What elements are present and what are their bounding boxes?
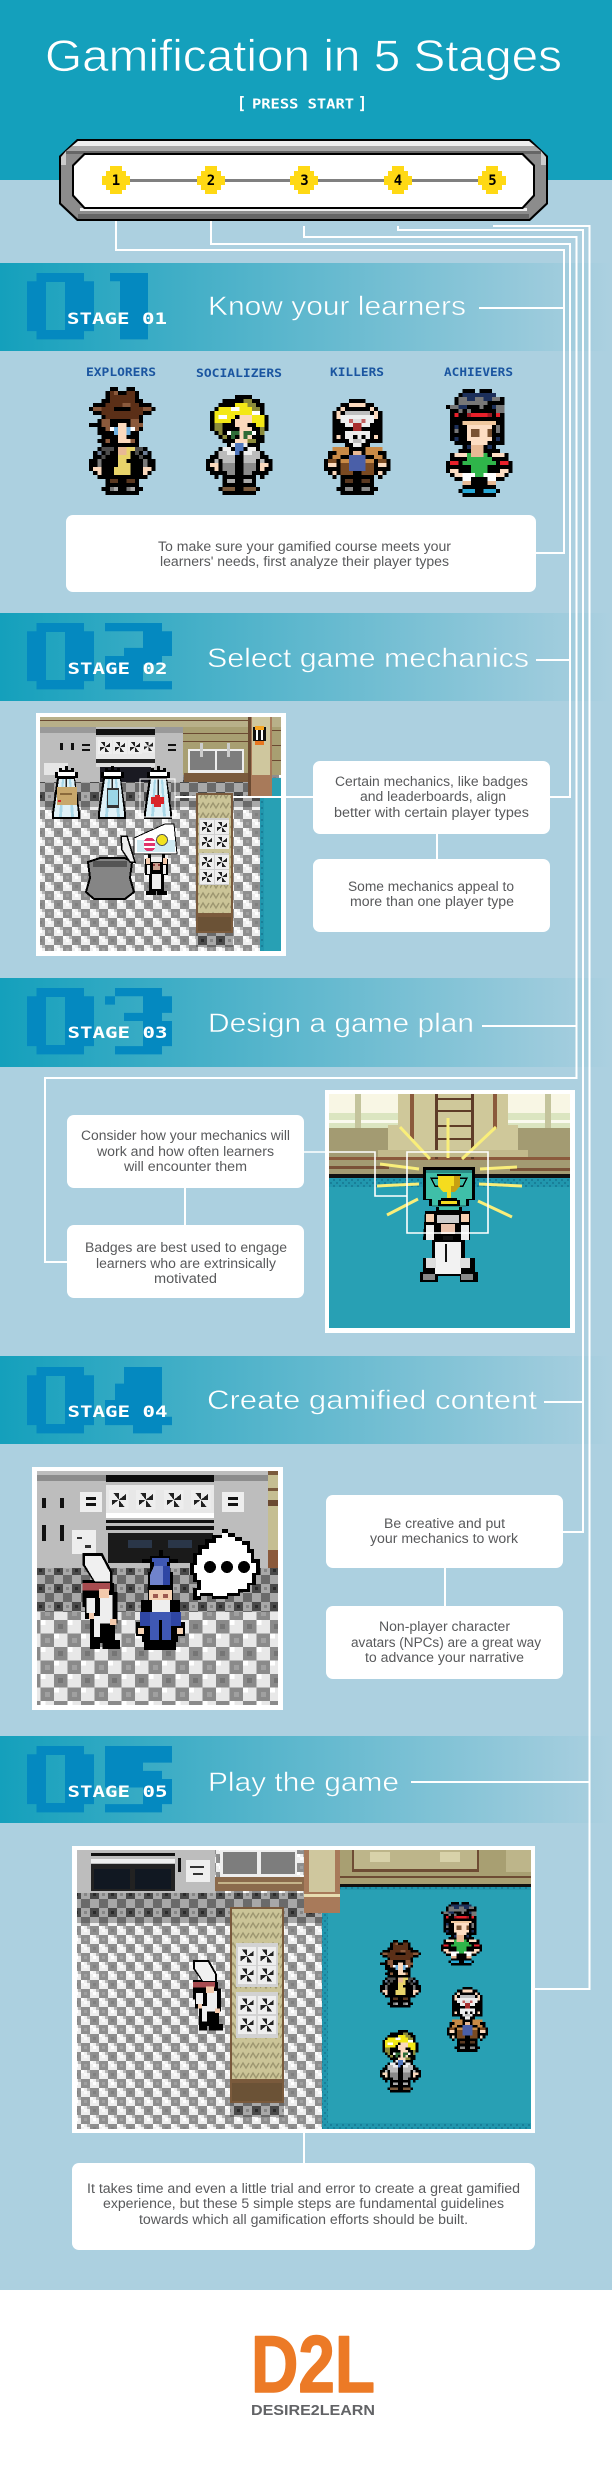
sprite: explorer <box>89 389 156 493</box>
callout: stage 4 second: Non-player character <box>379 1619 511 1634</box>
sprite: achiever <box>446 391 513 495</box>
callout: stage 2 first: and leaderboards, align <box>360 789 506 804</box>
back wall <box>340 1850 531 1887</box>
callout: stage 2 first: better with certain player types <box>334 805 529 820</box>
scene: kitchen floor with all players <box>72 1846 535 2133</box>
pedestal: map badge <box>52 766 80 819</box>
node 4: 4 <box>394 173 402 189</box>
stage 3 heading: Design a game plan <box>208 1008 474 1038</box>
pedestal: heart <box>144 766 172 819</box>
appliances <box>40 727 183 782</box>
press start label: [ <box>237 94 246 114</box>
stage band 4 <box>0 1356 612 1444</box>
callout: stage 3 second <box>67 1225 304 1298</box>
player type labels <box>86 365 513 380</box>
connector to callout <box>175 796 313 798</box>
closing callout: towards which all gamification efforts should be built. <box>139 2212 468 2227</box>
stage 5 label: STAGE 05 <box>68 1782 168 1801</box>
callout: stage 2 second: Some mechanics appeal to <box>348 879 514 894</box>
node 5: 5 <box>488 173 497 189</box>
stage 3 numeral <box>27 988 172 1054</box>
player type labels: EXPLORERS <box>86 365 156 379</box>
sprite: killer <box>324 401 391 493</box>
connector between callouts <box>436 834 438 859</box>
stage 5 heading: Play the game <box>208 1767 399 1797</box>
counter with burners <box>196 793 233 933</box>
press start label: ] <box>358 94 367 114</box>
callout: stage 3 second: learners who are extrinsically <box>96 1256 276 1271</box>
callout: stage 3 first <box>67 1115 304 1188</box>
title: Gamification in 5 Stages <box>45 32 562 81</box>
stage 1 heading: Know your learners <box>208 291 466 321</box>
callout: stage 4 second: to advance your narrative <box>365 1650 524 1665</box>
cooking pot <box>86 858 134 899</box>
logo: D2L <box>251 2320 375 2410</box>
appliance <box>77 1850 215 1893</box>
connector between callouts <box>184 1188 186 1225</box>
chef <box>193 1960 223 2030</box>
stage 2 heading: Select game mechanics <box>207 643 529 673</box>
pillar <box>304 1850 340 1913</box>
node 3: 3 <box>300 173 309 189</box>
closing callout: It takes time and even a little trial and error to create a great gamified <box>87 2181 520 2196</box>
feather <box>121 836 135 862</box>
stage 4 heading: Create gamified content <box>207 1385 538 1415</box>
callout: stage 3 second: Badges are best used to engage <box>85 1240 287 1255</box>
node 1 <box>102 166 130 194</box>
footer <box>0 2290 612 2466</box>
player: explorer <box>380 1941 421 2006</box>
chef arms raised <box>420 1211 478 1282</box>
connector lines from level bar to stages <box>45 221 590 1989</box>
dark floor <box>37 1565 278 1612</box>
player type labels: KILLERS <box>330 365 384 379</box>
chef side view <box>82 1553 120 1649</box>
player: achiever <box>441 1903 482 1964</box>
stage 2 label: STAGE 02 <box>68 659 168 678</box>
stage 1 numeral <box>27 273 148 339</box>
pedestal: phone <box>98 766 126 819</box>
stage 4 label: STAGE 04 <box>68 1402 168 1421</box>
press start label: PRESS START <box>252 98 354 112</box>
callout: stage 4 second: avatars (NPCs) are a great way <box>351 1635 541 1650</box>
header banner <box>0 0 612 180</box>
chef <box>145 853 168 895</box>
stage 2 numeral <box>27 623 172 689</box>
appliance wall <box>37 1471 268 1568</box>
callout: stage 1 <box>66 515 536 592</box>
callout: stage 1: learners' needs, first analyze their player types <box>160 554 449 569</box>
node 2: 2 <box>207 173 215 189</box>
connector between callouts <box>444 1568 446 1606</box>
speech bubble with dots <box>190 1529 260 1600</box>
wood strip <box>268 1471 278 1568</box>
callout: stage 2 second <box>313 859 550 932</box>
stage band 3 <box>0 978 612 1067</box>
callout: stage 4 second <box>326 1606 563 1679</box>
sprite: socializer <box>206 397 273 493</box>
node 2 <box>197 166 225 194</box>
scene: kitchen with pedestals <box>36 713 313 956</box>
stage band 2 <box>0 613 612 701</box>
wall <box>40 717 281 775</box>
callout: stage 3 first: Consider how your mechanics will <box>81 1128 290 1143</box>
stage 1 label: STAGE 01 <box>67 309 167 328</box>
stage 3 label: STAGE 03 <box>68 1023 168 1042</box>
sinks <box>184 743 248 782</box>
stage band 1 <box>0 263 612 351</box>
player type labels: ACHIEVERS <box>444 365 513 379</box>
progress line <box>116 179 493 182</box>
callout: stage 4 first: Be creative and put <box>384 1516 505 1531</box>
pillar with torch <box>248 717 272 796</box>
water <box>260 778 281 951</box>
central stair <box>378 1094 528 1159</box>
back wall <box>329 1094 570 1178</box>
callout: stage 3 second: motivated <box>154 1271 217 1286</box>
trophy badge <box>423 1167 475 1213</box>
press start label <box>237 94 367 114</box>
player type labels: SOCIALIZERS <box>196 366 282 380</box>
callout: stage 3 first: will encounter them <box>123 1159 247 1174</box>
callout: stage 4 first <box>326 1495 563 1568</box>
counter with burners <box>230 1907 284 2103</box>
callout: stage 2 first: Certain mechanics, like badges <box>335 774 528 789</box>
water <box>329 1175 570 1328</box>
callout: stage 2 second: more than one player type <box>350 894 514 909</box>
closing callout: experience, but these 5 simple steps are fundamental guidelines <box>103 2196 504 2211</box>
sinks <box>215 1850 305 1891</box>
stage band 5 <box>0 1736 612 1823</box>
thought bubble with badges <box>134 824 177 854</box>
node 4 <box>384 166 412 194</box>
node 3 <box>290 166 318 194</box>
water <box>322 1885 531 2129</box>
callout: stage 3 first: work and how often learners <box>96 1144 274 1159</box>
connector to closing callout <box>303 2133 305 2163</box>
logo: DESIRE2LEARN <box>251 2402 375 2419</box>
light rays <box>377 1118 522 1217</box>
wizard NPC <box>136 1550 185 1650</box>
player: killer <box>447 1988 488 2050</box>
callout: stage 2 first <box>313 761 550 834</box>
callout: stage 4 first: your mechanics to work <box>370 1531 518 1546</box>
player: socializer <box>380 2031 421 2091</box>
scene: chef raising trophy badge <box>304 1090 575 1333</box>
highlight frame <box>304 1152 488 1233</box>
stage 4 numeral <box>27 1367 172 1433</box>
callout: stage 1: To make sure your gamified course meets your <box>158 539 452 554</box>
node 1: 1 <box>112 173 120 189</box>
stage 5 numeral <box>27 1746 172 1812</box>
scene: NPC wizard and chef <box>32 1467 283 1710</box>
level select bar <box>59 139 548 221</box>
node 5 <box>478 166 506 194</box>
closing callout <box>72 2163 535 2250</box>
highlight frame <box>140 779 175 817</box>
